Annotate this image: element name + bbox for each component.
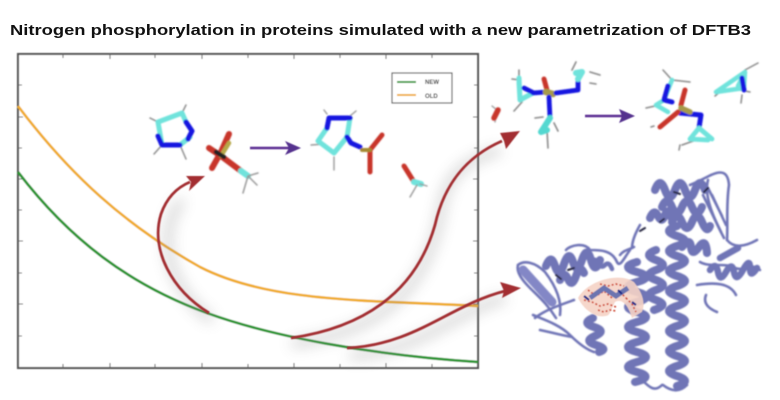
ligand mesh in protein pocket (578, 278, 644, 318)
reaction arrow: energy minimum to first complex (158, 176, 209, 313)
curve: NEW (18, 172, 478, 362)
molecule: imidazole and methyl phosphate reactants (150, 105, 258, 193)
molecule: phosphorylated histidine products (646, 63, 758, 150)
protein: right domain curls (710, 248, 757, 278)
purple arrow: second reaction step (585, 109, 635, 123)
reaction arrow: energy minimum to second complex (291, 131, 520, 338)
curve: OLD (18, 106, 478, 306)
protein: left domain sheet (518, 245, 630, 352)
molecule: water and phosphoramidate complex (492, 62, 600, 148)
legend (392, 73, 452, 103)
molecule: phosphorylated imidazole products (311, 110, 427, 197)
arrow shadows (168, 150, 505, 356)
legend: NEW (425, 80, 439, 86)
protein: left domain beta strands thick (523, 270, 552, 302)
protein: dark shading (556, 188, 708, 279)
protein: connecting strands (590, 260, 612, 269)
protein: upper right domain and beta sheet (620, 172, 760, 390)
purple arrow: first reaction step (250, 141, 301, 155)
reaction arrow: energy minimum to protein (347, 282, 521, 348)
legend: OLD (425, 94, 438, 100)
protein structure (518, 172, 760, 390)
protein: long helix columns (546, 183, 710, 386)
chart: energy curves (18, 54, 478, 368)
title: Nitrogen phosphorylation in proteins simulated with a new parametrization of DFTB3 (10, 22, 751, 39)
